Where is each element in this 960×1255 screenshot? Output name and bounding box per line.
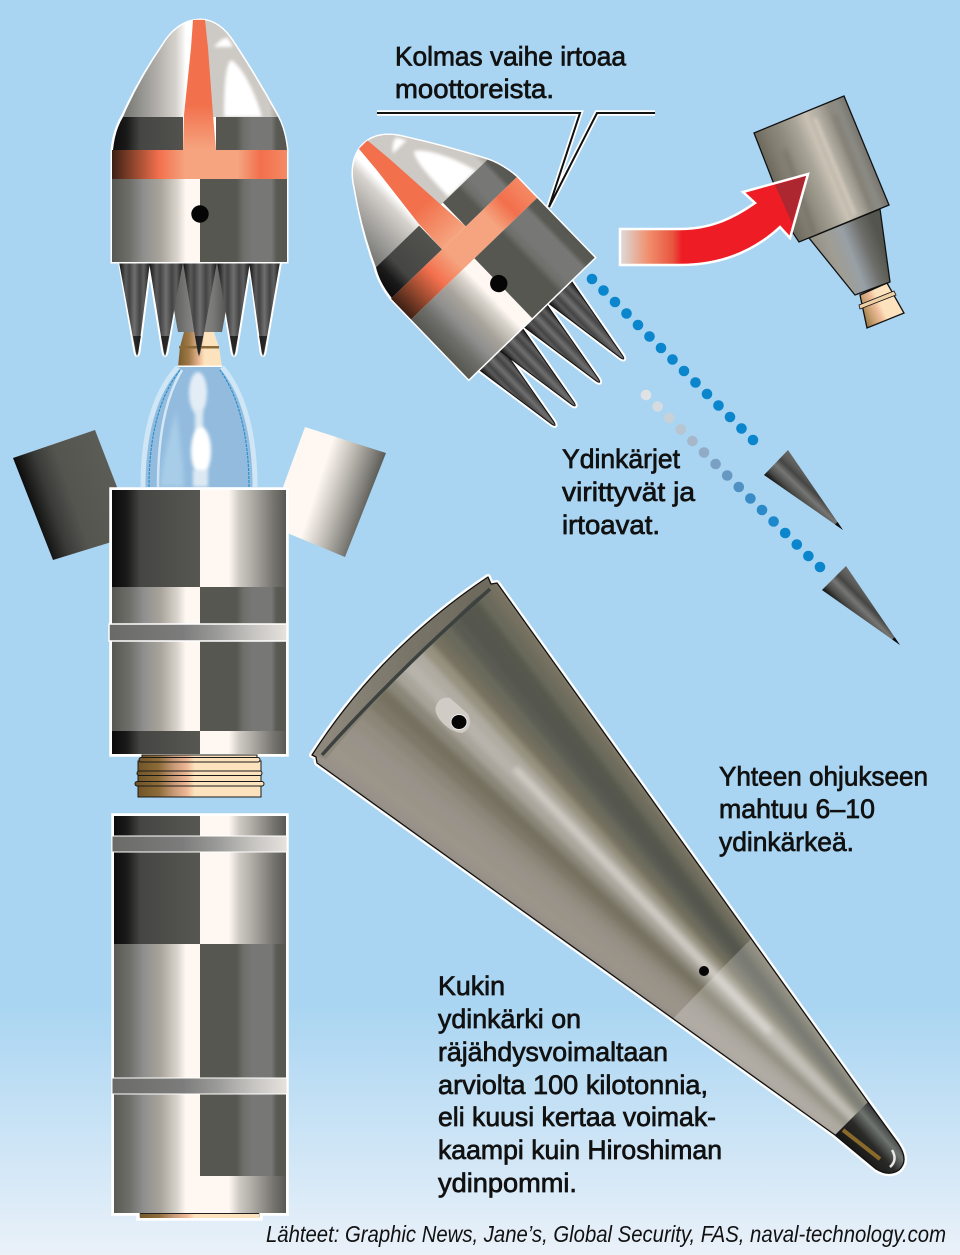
nose and body [112, 20, 287, 262]
motor nozzle ring [859, 291, 896, 309]
motor nozzle [860, 283, 904, 328]
released warhead two [822, 566, 900, 645]
red arrow [620, 174, 808, 265]
dotted trajectory, warhead two [641, 390, 825, 572]
text: warhead yield: ydinkärki on [438, 1004, 581, 1034]
text: warhead count: Yhteen ohjukseen [719, 762, 928, 792]
text: warhead count [719, 762, 928, 857]
text: warheads arm and release: irtoavat. [562, 510, 660, 540]
warhead black tip [836, 1102, 904, 1173]
text: third stage separates [395, 42, 626, 104]
brass nozzle [178, 332, 222, 367]
text: warhead yield: eli kuusi kertaa voimak- [438, 1102, 716, 1132]
threaded coupling [135, 755, 264, 797]
first stage [112, 815, 287, 1219]
text: third stage separates: Kolmas vaihe irtoaa [395, 42, 626, 72]
second stage [109, 489, 287, 755]
warhead rim cap [312, 577, 497, 759]
released warhead one [764, 450, 843, 530]
text: third stage separates: moottoreista. [395, 74, 554, 104]
left shroud panel [13, 430, 118, 560]
text: warhead yield: ydinpommi. [438, 1168, 577, 1198]
detached third stage motor [754, 96, 904, 328]
tilted cones outline [479, 281, 636, 436]
warhead highlight streak [515, 768, 770, 1032]
exhaust plume [143, 367, 255, 487]
text: warhead count: mahtuu 6–10 [719, 794, 875, 824]
warhead cones [119, 262, 280, 355]
motor streaks [785, 115, 872, 235]
first stage lower band [112, 1078, 287, 1094]
tilted bus body [301, 83, 595, 379]
warhead nose lightening [674, 939, 868, 1134]
text: warheads arm and release: Ydinkärjet [562, 444, 681, 474]
right shroud panel [280, 427, 386, 557]
text: warhead yield: kaampi kuin Hiroshiman [438, 1135, 722, 1165]
centre cone shroud [174, 262, 226, 332]
text: warheads arm and release [562, 444, 695, 540]
warhead shaded surface [313, 578, 904, 1173]
warhead white outline [312, 577, 904, 1173]
tilted warhead cones [479, 281, 636, 436]
third stage warhead bus, upright [112, 20, 287, 367]
tilted warhead bus separating [301, 83, 659, 446]
warhead black outline [312, 577, 904, 1173]
warhead cones outline [120, 262, 280, 355]
arrow head overlap on motor [775, 176, 806, 223]
motor cylinder [754, 96, 889, 242]
leader line [377, 113, 655, 207]
warhead access slot [436, 698, 470, 733]
motor cone [809, 209, 890, 295]
text: warhead yield: Kukin [438, 971, 505, 1001]
warhead cone tips [133, 336, 267, 357]
first stage upper band [112, 836, 287, 852]
text: warhead yield: räjähdysvoimaltaan [438, 1037, 668, 1067]
large warhead cutaway [309, 574, 908, 1176]
text: warhead yield: arviolta 100 kilotonnia, [438, 1070, 708, 1100]
warhead small hole [699, 966, 709, 976]
text: warhead yield [438, 971, 722, 1198]
second stage band [109, 624, 287, 641]
text: warhead count: ydinkärkeä. [719, 827, 854, 857]
text: warheads arm and release: virittyvät ja [562, 477, 695, 507]
dotted trajectory, warhead one [587, 274, 758, 445]
